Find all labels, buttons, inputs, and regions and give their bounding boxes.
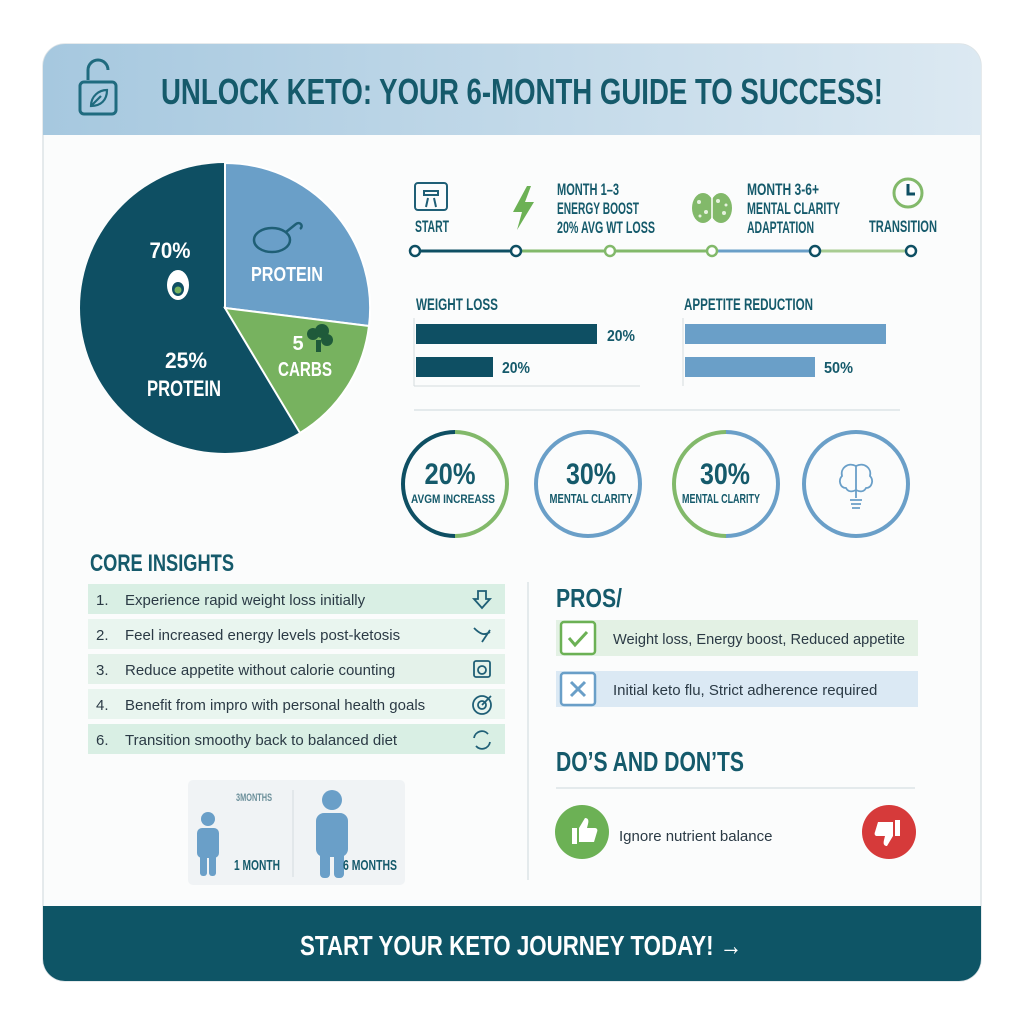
stat circles: [403, 432, 908, 536]
stat: 30% b: [674, 432, 778, 536]
core insights list: 1.: [96, 592, 109, 609]
pros heading: PROS/: [556, 583, 622, 613]
stat: 30%: [536, 432, 640, 536]
timeline: START: [415, 217, 449, 236]
stat: 20%: 20%: [424, 458, 476, 491]
stat: 30%: MENTAL CLARITY: [550, 491, 633, 506]
figure comparison panel: 3MONTHS: [236, 792, 272, 804]
core insights list: Experience rapid weight loss initially: [125, 592, 366, 609]
footer call to action: START YOUR KETO JOURNEY TODAY! →: [300, 930, 742, 961]
timeline: MONTH 3-6+: [747, 180, 819, 199]
figure: 1 month: [197, 812, 219, 876]
icon: broccoli: [307, 324, 333, 352]
icon: avocado: [167, 270, 189, 300]
dos and donts heading: DO’S AND DON’TS: [556, 746, 744, 777]
stat: 20%: AVGM INCREASS: [411, 492, 495, 506]
pie chart: [80, 163, 370, 453]
cons row: [556, 671, 918, 707]
timeline: TRANSITION: [869, 217, 937, 236]
timeline: MENTAL CLARITY: [747, 199, 840, 218]
text: Ignore nutrient balance: [619, 828, 772, 845]
icon: clock: [894, 179, 922, 207]
core insights list: Benefit from impro with personal health goals: [125, 697, 425, 714]
pie label: 70% fat: 70%: [150, 238, 190, 263]
icon: scale: [415, 183, 447, 210]
core insights heading: CORE INSIGHTS: [90, 550, 234, 577]
bar chart: appetite reduction: 50%: [824, 360, 853, 377]
core insights list: 2.: [96, 627, 109, 644]
timeline: ENERGY BOOST: [557, 199, 639, 218]
core insights list: 4.: [96, 697, 109, 714]
core insights list: 6.: [96, 732, 109, 749]
figure: 6 months: [316, 790, 348, 878]
pros row: [556, 620, 918, 656]
bar chart: weight loss: 20%: [607, 328, 635, 345]
pie label: 25% protein: 25%: [165, 348, 207, 373]
stat: 20%: [403, 432, 507, 536]
timeline: MONTH 1–3: [557, 180, 619, 199]
timeline: 20% AVG WT LOSS: [557, 218, 655, 237]
stat: brain bulb: [804, 432, 908, 536]
pie chart: PROTEIN: [147, 376, 221, 401]
figure comparison panel: [188, 780, 405, 885]
pie label: protein: PROTEIN: [251, 264, 323, 286]
bar chart: weight loss: WEIGHT LOSS: [416, 295, 498, 314]
bar chart: weight loss: 20%: [502, 360, 530, 377]
figure comparison panel: 6 MONTHS: [343, 857, 397, 874]
stat: 30%: 30%: [566, 458, 616, 491]
core insights list: Reduce appetite without calorie counting: [125, 662, 395, 679]
core insights list: Transition smoothy back to balanced diet: [125, 732, 398, 749]
icon: lightning: [513, 186, 534, 230]
icon: thumbs down: [862, 805, 916, 859]
core insights list: 3.: [96, 662, 109, 679]
icon: brain green: [692, 193, 732, 223]
figure comparison panel: 1 MONTH: [234, 857, 280, 874]
icon: chicken leg: [254, 223, 302, 252]
bar chart: weight loss: [414, 295, 640, 386]
timeline: [410, 179, 937, 256]
cons row: Initial keto flu, Strict adherence required: [613, 682, 877, 699]
stat: 30% b: MENTAL CLARITY: [682, 491, 760, 506]
core insights list: [88, 584, 505, 754]
core insights list: Feel increased energy levels post-ketosis: [125, 627, 400, 644]
footer call to action: [43, 906, 981, 982]
bar chart: appetite reduction: APPETITE REDUCTION: [684, 295, 813, 314]
timeline: ADAPTATION: [747, 218, 814, 237]
pie label: 5% carbs: 5: [292, 333, 304, 355]
bar chart: appetite reduction: [683, 295, 886, 386]
pie chart: CARBS: [278, 359, 332, 381]
icon: thumbs up: [555, 805, 609, 859]
pros row: Weight loss, Energy boost, Reduced appetite: [613, 631, 905, 648]
icon: lock with leaf: [80, 60, 116, 114]
stat: 30% b: 30%: [700, 458, 750, 491]
header band: [43, 44, 981, 135]
